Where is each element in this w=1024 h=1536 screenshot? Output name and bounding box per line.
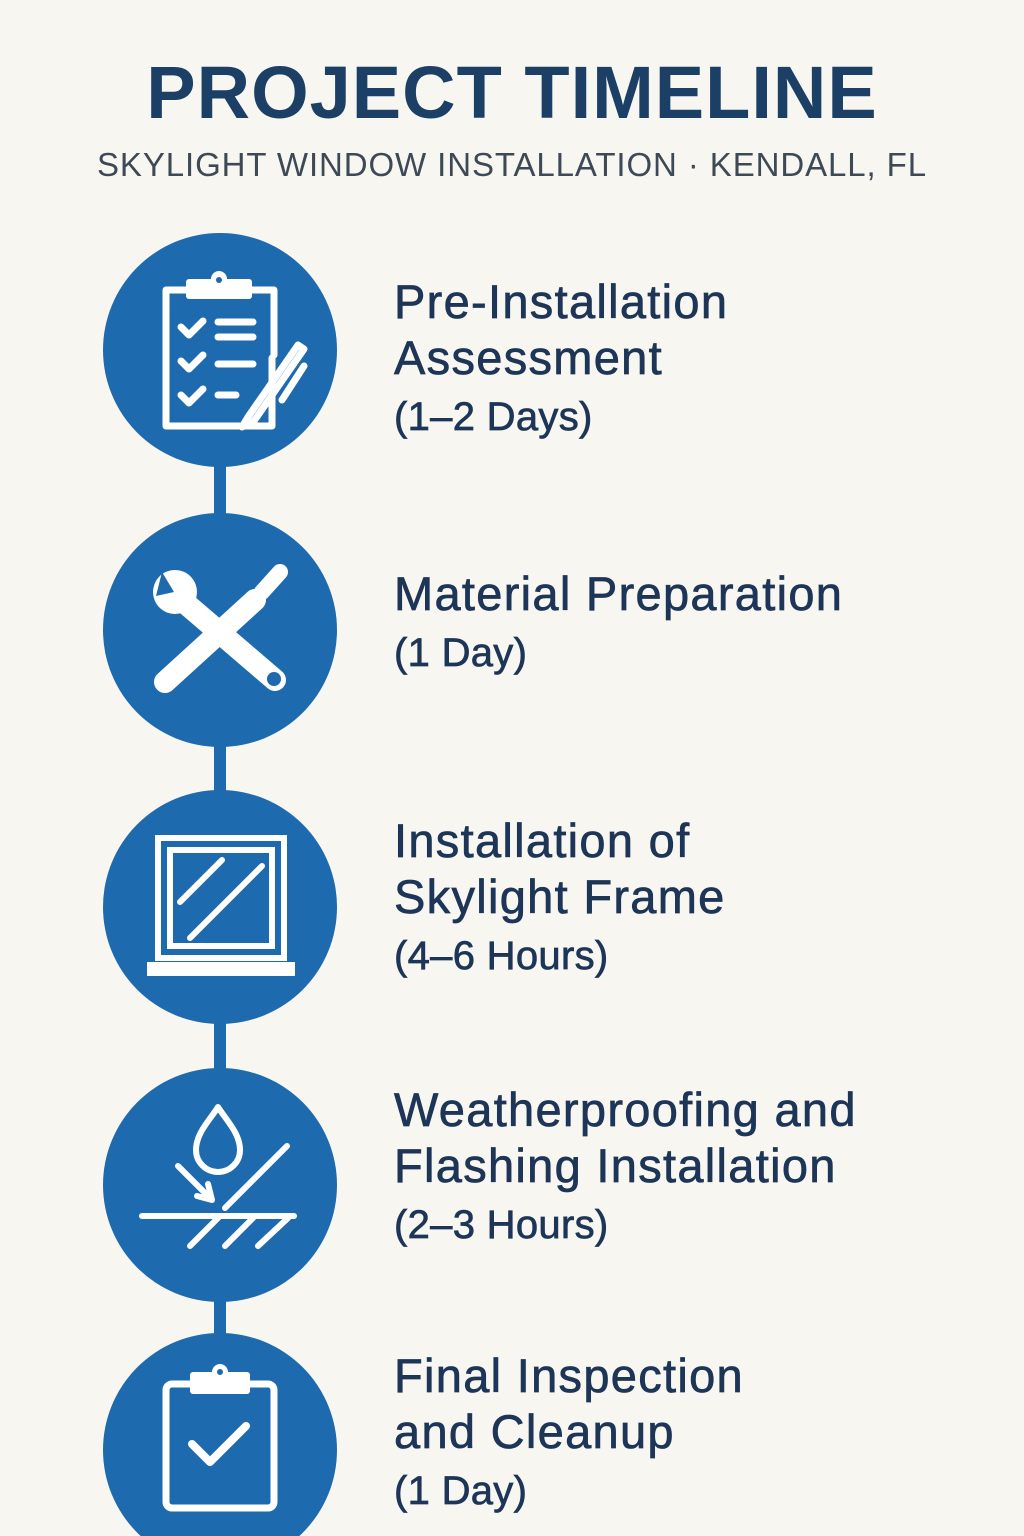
step 1 text: Pre-Installation bbox=[394, 275, 728, 328]
title: PROJECT TIMELINE bbox=[146, 51, 878, 134]
step 4 text: Weatherproofing and bbox=[394, 1083, 857, 1136]
step 3 text: Installation of bbox=[394, 814, 690, 867]
step 4 text bbox=[394, 1083, 857, 1247]
step 1 text bbox=[394, 275, 728, 439]
icon: wrench and screwdriver bbox=[103, 513, 337, 747]
subtitle: SKYLIGHT WINDOW INSTALLATION · KENDALL, FL bbox=[97, 146, 927, 183]
icon: skylight window bbox=[103, 790, 337, 1024]
step 3 text bbox=[394, 814, 726, 978]
step 4 text: Flashing Installation bbox=[394, 1139, 837, 1192]
step 4 text: (2–3 Hours) bbox=[394, 1203, 608, 1247]
icon: clipboard checklist bbox=[103, 233, 337, 467]
step 2 text bbox=[394, 567, 843, 675]
step 1 text: (1–2 Days) bbox=[394, 395, 593, 439]
icon: water drop flashing bbox=[103, 1068, 337, 1302]
step 5 text: Final Inspection bbox=[394, 1349, 744, 1402]
step 1 text: Assessment bbox=[394, 331, 663, 384]
step 2 text: (1 Day) bbox=[394, 631, 527, 675]
step 3 text: Skylight Frame bbox=[394, 870, 726, 923]
step 2 text: Material Preparation bbox=[394, 567, 843, 620]
step 3 text: (4–6 Hours) bbox=[394, 934, 608, 978]
connector line bbox=[214, 350, 226, 1450]
icon: clipboard check bbox=[103, 1333, 337, 1536]
step 5 text: and Cleanup bbox=[394, 1405, 675, 1458]
step 5 text bbox=[394, 1349, 744, 1513]
step 5 text: (1 Day) bbox=[394, 1469, 527, 1513]
